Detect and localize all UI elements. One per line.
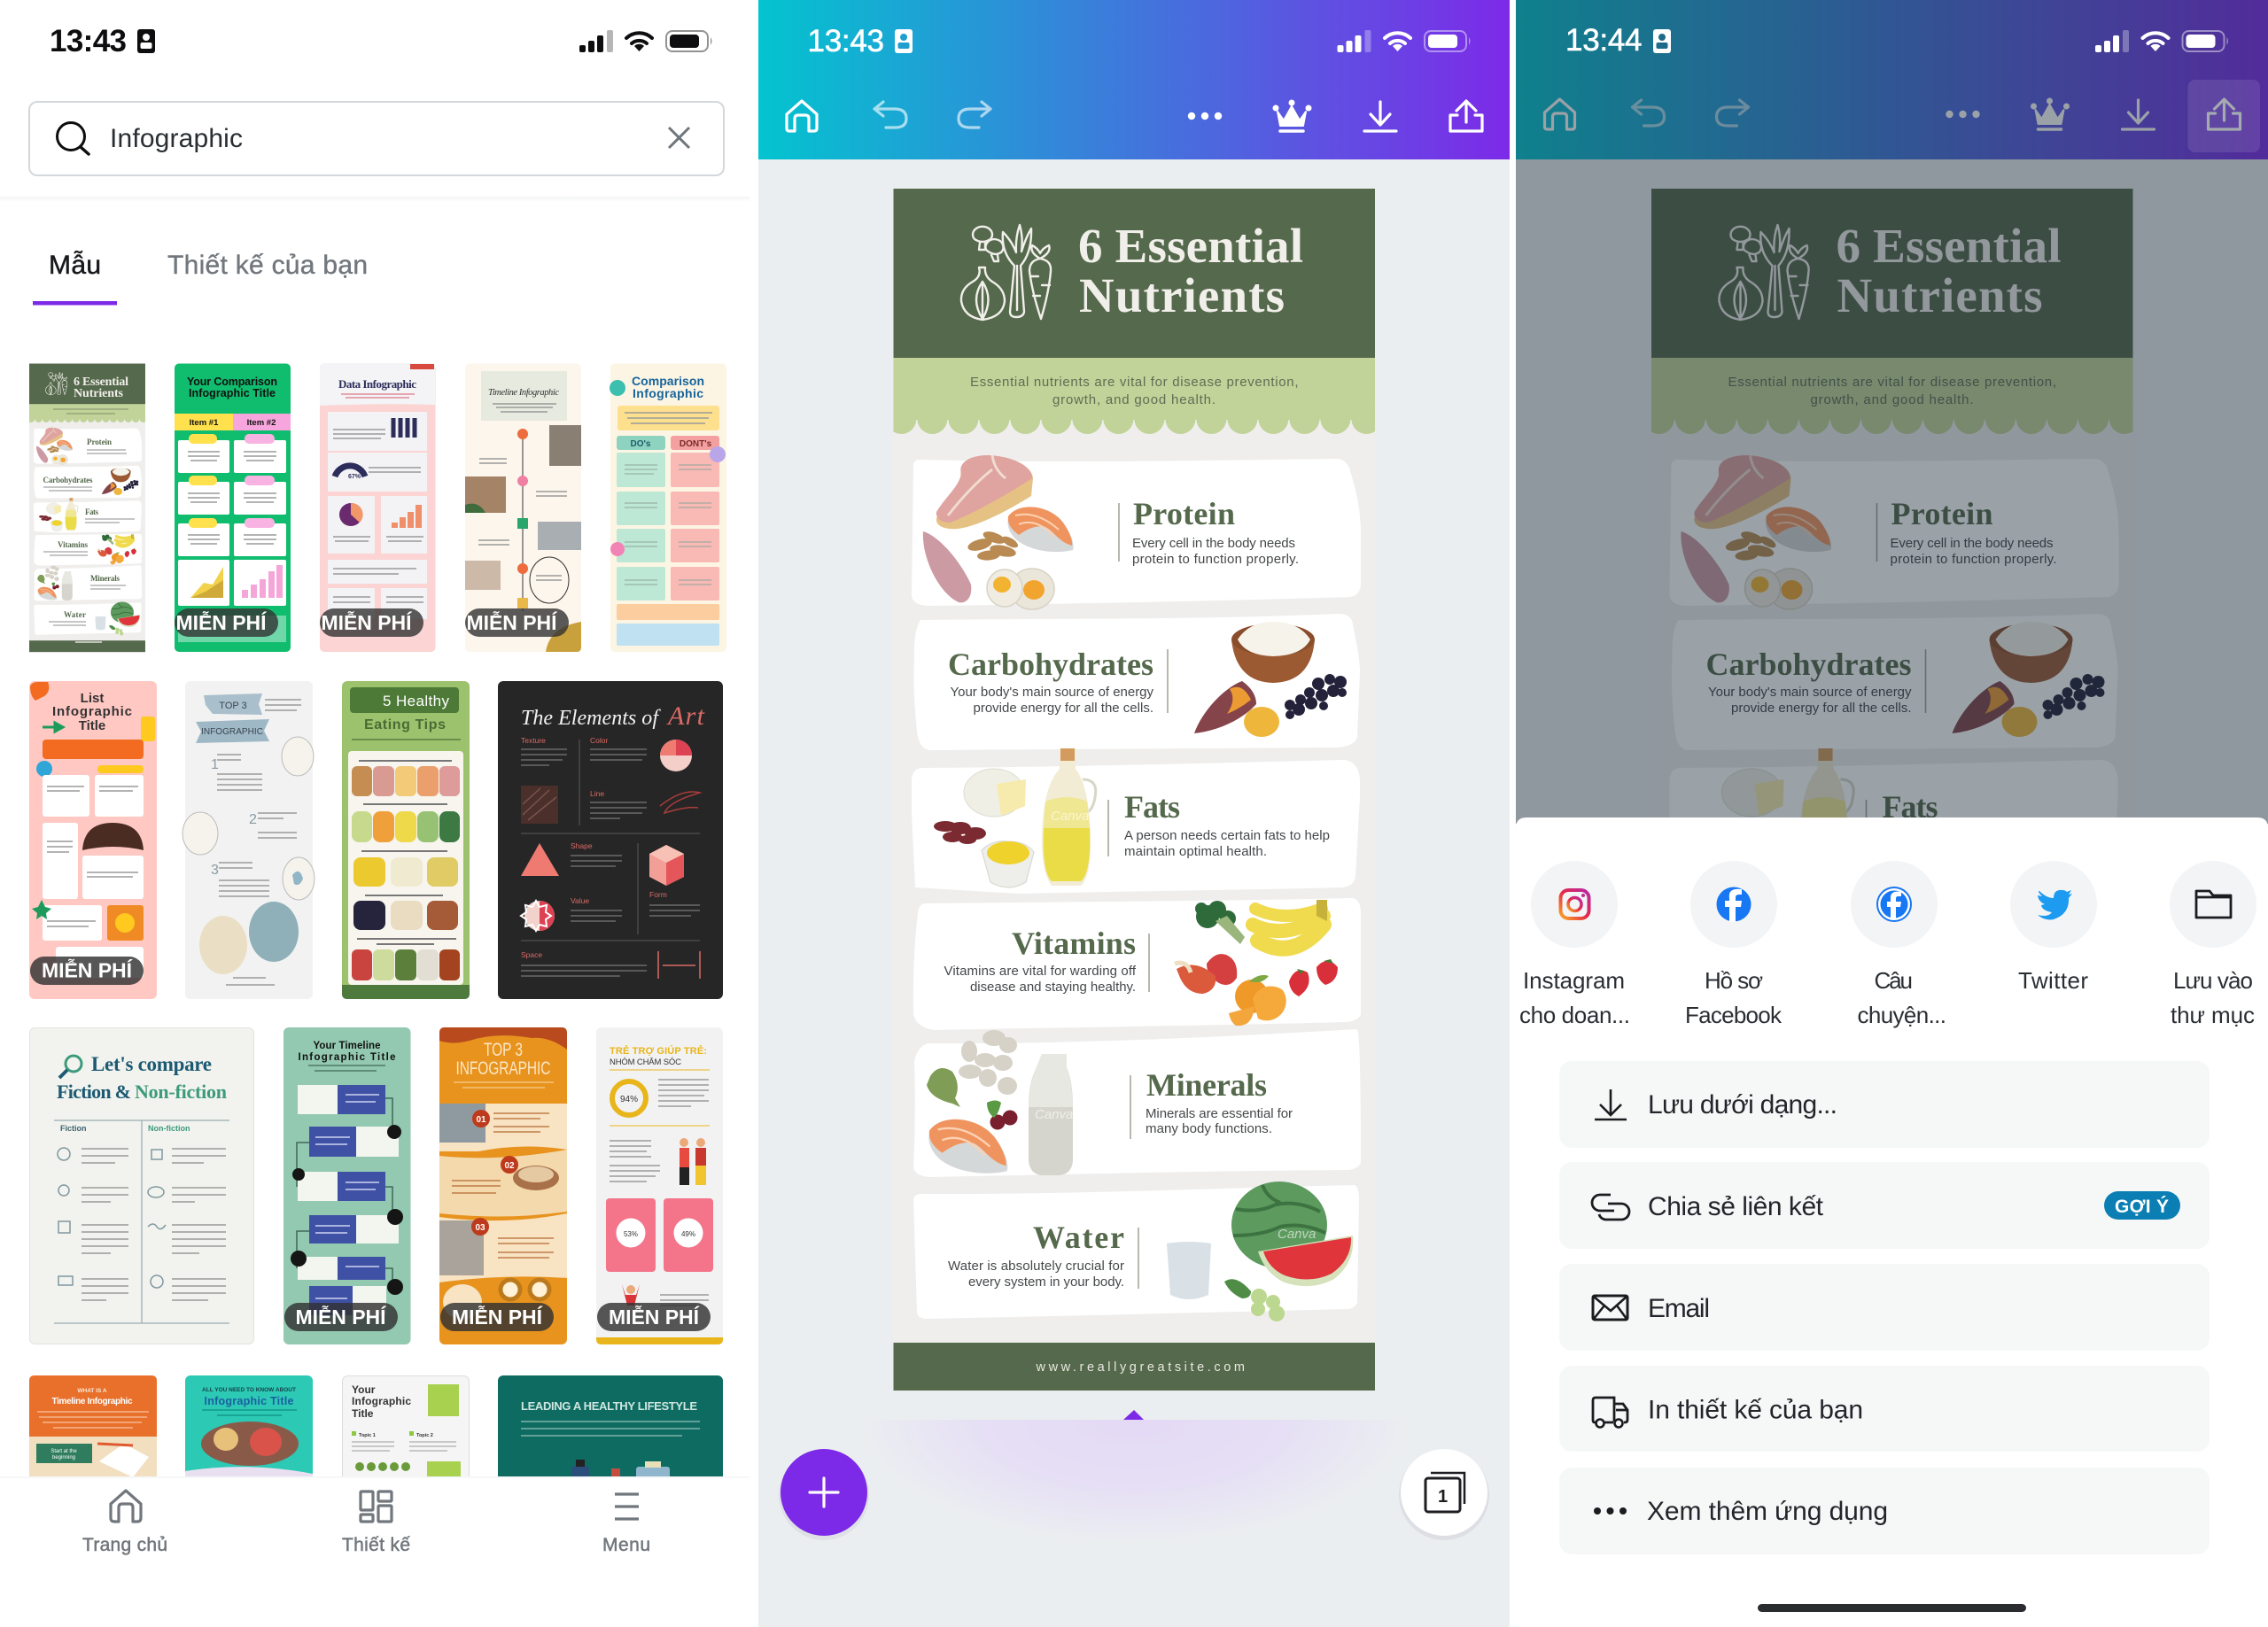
thumbnail: your infographic title partial: Topic 2 [416, 1433, 433, 1438]
panel: design editor screen [758, 0, 1510, 1627]
status bar: 13:43 [50, 24, 127, 58]
thumbnail: 6 Essential Nutrients: Nutrients [74, 387, 124, 400]
protein text [1119, 496, 1299, 567]
thumbnail: comparison do and dont: Infographic [633, 386, 703, 400]
row: more apps [1559, 1468, 2210, 1554]
canva watermarks: Canva [1051, 809, 1089, 824]
infographic canvas dimmed: Nutrients [1837, 268, 2043, 322]
thumbnail: comparison do and dont [610, 363, 726, 652]
thumbnail: timeline orange partial: Timeline Infographic [51, 1397, 133, 1406]
infographic canvas dimmed: Protein [1891, 496, 1993, 531]
thumbnail: your infographic title partial: Title [352, 1407, 374, 1420]
share target: facebook story [1851, 861, 1946, 1028]
free badges row 3: MIỄN PHÍ [452, 1304, 543, 1329]
thumbnail: 6 Essential Nutrients: Fats [85, 507, 98, 516]
thumbnail: top 3 orange infographic: 03 [475, 1223, 485, 1233]
free badge row 2: MIỄN PHÍ [42, 957, 133, 981]
footer url: www.reallygreatsite.com [1035, 1360, 1245, 1375]
fats text: Fats [1124, 789, 1180, 825]
row: share link: GỢI Ý [2115, 1196, 2169, 1217]
bottom navigation bar [0, 1476, 758, 1627]
share target: facebook story: chuyện... [1857, 1002, 1946, 1028]
thumbnail: the elements of art: Art [666, 701, 705, 731]
page handle arrow [1123, 1410, 1144, 1420]
thumbnail: comparison do and dont: DONT's [680, 439, 712, 449]
thumbnail: 6 Essential Nutrients: Minerals [90, 574, 120, 583]
thumbnail: top 3 sketch infographic: TOP 3 [219, 701, 247, 711]
thumbnail: data infographic: 67% [348, 474, 361, 480]
thumbnail: the elements of art: Form [649, 890, 667, 899]
water text: Water [1033, 1220, 1124, 1255]
thumbnail: 5 healthy eating tips [342, 681, 470, 999]
bottom navigation bar: Trang chủ [82, 1535, 167, 1555]
thumbnail: the elements of art: The Elements of [521, 707, 661, 730]
thumbnail: the elements of art [498, 681, 723, 999]
carbohydrates text: Your body's main source of energy [950, 685, 1153, 700]
thumbnail: data infographic [320, 363, 436, 652]
infographic canvas dimmed: provide energy for all the cells. [1731, 701, 1912, 716]
thumbnail: your infographic title partial [342, 1376, 470, 1486]
gradient top bar: 13:43 [808, 24, 884, 58]
infographic canvas dimmed: Fats [1882, 789, 1938, 825]
thumbnail: top 3 orange infographic: 01 [476, 1115, 486, 1125]
thumbnail: top 3 sketch infographic [183, 681, 315, 999]
row: email: Email [1648, 1294, 1710, 1323]
status bar [1565, 23, 2228, 58]
vitamins text: Vitamins are vital for warding off [944, 964, 1137, 979]
thumbnail: 6 Essential Nutrients: 6 Essential [74, 376, 128, 389]
thumbnail: 6 Essential Nutrients: Vitamins [58, 540, 88, 549]
infographic canvas [886, 189, 1381, 1391]
page count button: 1 [1438, 1487, 1448, 1507]
thumbnail: comparison do and dont: Comparison [632, 374, 704, 388]
thumbnail: 6 Essential Nutrients: Water [64, 610, 86, 619]
water text: every system in your body. [968, 1274, 1124, 1290]
thumbnail: comparison infographic: Your Comparison [187, 376, 277, 388]
thumbnail: lets compare fiction and non-fiction: Fiction [60, 1124, 87, 1133]
thumbnail: timeline orange partial: WHAT IS A [77, 1388, 107, 1394]
thumbnail: comparison infographic: Item #1 [190, 418, 219, 428]
thumbnail: tre tro giup tre: 49% [681, 1230, 695, 1238]
thumbnail: 6 Essential Nutrients: Carbohydrates [43, 476, 93, 484]
protein text: Every cell in the body needs [1132, 536, 1295, 551]
row: save as: Lưu dưới dạng... [1648, 1090, 1837, 1120]
share target: save to folder: Lưu vào [2173, 967, 2253, 994]
thumbnail: top 3 sketch infographic: 1 [211, 757, 219, 772]
row: print design: In thiết kế của bạn [1648, 1396, 1863, 1424]
thumbnail: your timeline infographic: Your Timeline [314, 1041, 381, 1051]
thumbnail: lets compare fiction and non-fiction: Non-fiction [135, 1081, 227, 1103]
intro text: growth, and good health. [1052, 392, 1216, 407]
share target: facebook profile: Facebook [1685, 1002, 1783, 1028]
thumbnail: list infographic [29, 681, 157, 999]
share target: instagram [1519, 861, 1630, 1028]
row: share link [1559, 1162, 2210, 1249]
thumbnail: 6 Essential Nutrients: Protein [87, 438, 112, 446]
status bar: 13:44 [1565, 23, 1643, 58]
thumbnail: comparison do and dont: DO's [631, 439, 651, 449]
row: email [1559, 1264, 2210, 1351]
infographic canvas dimmed [1644, 189, 2140, 1391]
dim overlay [1516, 0, 2268, 824]
thumbnail: infographic title teal partial: Infographic Title [204, 1395, 294, 1407]
intro text [970, 375, 1299, 407]
free badges row 3 [284, 1303, 711, 1331]
row: share link: Chia sẻ liên kết [1648, 1192, 1824, 1221]
carbohydrates text: Carbohydrates [948, 647, 1153, 682]
thumbnail: 5 healthy eating tips: Eating Tips [364, 717, 446, 732]
minerals text: many body functions. [1146, 1121, 1272, 1136]
share target: instagram: Instagram [1523, 967, 1625, 994]
thumbnail: top 3 orange infographic [439, 1027, 567, 1344]
bottom navigation bar: Menu [602, 1535, 650, 1555]
thumbnail: the elements of art: Shape [571, 841, 593, 850]
carbohydrates text: provide energy for all the cells. [973, 701, 1153, 716]
carbohydrates text [948, 647, 1168, 716]
water text [948, 1220, 1138, 1290]
free badges row 1: MIỄN PHÍ [321, 609, 412, 634]
add button [779, 1449, 869, 1540]
thumbnail: 5 healthy eating tips: 5 Healthy [383, 693, 450, 709]
page count button [1399, 1449, 1489, 1540]
share target: instagram: cho doan... [1519, 1002, 1630, 1028]
canva watermarks [1035, 809, 1316, 1242]
fats text: maintain optimal health. [1124, 844, 1267, 859]
thumbnail: lets compare fiction and non-fiction: Let's compare [91, 1053, 212, 1075]
thumbnail: timeline infographic: Timeline Infographic [488, 388, 559, 398]
share target: facebook profile [1685, 861, 1783, 1028]
thumbnail: the elements of art: Color [590, 736, 608, 745]
thumbnail: the elements of art: Line [590, 789, 604, 798]
protein text: Protein [1133, 496, 1235, 531]
thumbnail: top 3 sketch infographic: 3 [211, 863, 219, 878]
infographic canvas dimmed: 6 Essential [1836, 219, 2061, 273]
thumbnail: top 3 orange infographic: INFOGRAPHIC [455, 1057, 551, 1079]
row: save as [1559, 1061, 2210, 1148]
share target: save to folder [2170, 861, 2256, 1028]
thumbnail: infographic title teal partial [185, 1375, 313, 1488]
row: print design [1559, 1366, 2210, 1452]
purple glow under canvas [926, 1420, 1343, 1515]
free badges row 3: MIỄN PHÍ [296, 1304, 386, 1329]
free badge row 2 [30, 957, 144, 985]
infographic canvas dimmed: growth, and good health. [1811, 392, 1974, 407]
thumbnail: leading a healthy lifestyle partial: LEADING A HEALTHY LIFESTYLE [521, 1399, 697, 1413]
thumbnail: timeline orange partial [29, 1375, 157, 1486]
thumbnail: data infographic: Data Infographic [338, 377, 416, 391]
search box: Infographic [110, 124, 243, 153]
thumbnail: top 3 sketch infographic: 2 [249, 812, 257, 827]
bottom navigation bar: Thiết kế [342, 1535, 410, 1555]
vitamins text: Vitamins [1012, 926, 1136, 961]
title [1078, 219, 1303, 322]
thumbnail: infographic title teal partial: ALL YOU NEED TO KNOW ABOUT [202, 1387, 296, 1393]
thumbnail: comparison infographic: Item #2 [247, 418, 276, 428]
thumbnail: comparison infographic [175, 363, 291, 652]
fats text [1108, 789, 1330, 859]
share target: twitter [2010, 861, 2097, 994]
thumbnail: the elements of art: Space [521, 950, 542, 959]
vitamins text: disease and staying healthy. [970, 980, 1136, 995]
thumbnail: lets compare fiction and non-fiction: Fiction & [57, 1081, 131, 1103]
free badges row 3: MIỄN PHÍ [609, 1304, 700, 1329]
infographic canvas dimmed: protein to function properly. [1891, 552, 2057, 567]
thumbnail: tre tro giup tre [596, 1027, 723, 1344]
thumbnail: timeline orange partial: beginning [52, 1455, 75, 1460]
thumbnail: tre tro giup tre: NHÓM CHĂM SÓC [610, 1058, 681, 1067]
thumbnail: tre tro giup tre: TRẺ TRỢ GIÚP TRẺ: [610, 1045, 707, 1057]
vitamins text [944, 926, 1149, 995]
share target: facebook profile: Hồ sơ [1705, 967, 1763, 994]
thumbnail: list infographic: Infographic [52, 704, 132, 719]
infographic canvas dimmed: Every cell in the body needs [1891, 536, 2054, 551]
title: 6 Essential [1078, 219, 1303, 273]
water text: Water is absolutely crucial for [948, 1259, 1124, 1274]
canva watermarks: Canva [1035, 1107, 1073, 1122]
panel: template search screen [0, 0, 758, 1627]
thumbnail: timeline infographic [465, 363, 581, 652]
thumbnail: your infographic title partial: Infographic [352, 1395, 411, 1407]
free badges row 1: MIỄN PHÍ [175, 609, 267, 634]
thumbnail: timeline orange partial: Start at the [50, 1449, 77, 1454]
thumbnail: tre tro giup tre: 94% [620, 1095, 638, 1104]
thumbnail: top 3 sketch infographic: INFOGRAPHIC [201, 727, 263, 737]
thumbnail: tre tro giup tre: 53% [624, 1230, 638, 1238]
panel: share sheet screen [1516, 0, 2268, 1627]
gradient top bar dimmed [1516, 0, 2268, 159]
thumbnail: comparison infographic: Infographic Title [189, 387, 276, 399]
thumbnail: your infographic title partial: Topic 1 [359, 1433, 376, 1438]
thumbnail: lets compare fiction and non-fiction [30, 1027, 253, 1344]
fats text: A person needs certain fats to help [1124, 828, 1330, 843]
gradient top bar [758, 0, 1510, 159]
thumbnail: list infographic: List [81, 691, 104, 706]
tabs: Mẫu [49, 251, 101, 280]
share sheet [1516, 817, 2268, 1627]
free badges row 1: MIỄN PHÍ [466, 609, 557, 634]
infographic canvas dimmed: Essential nutrients are vital for disease prevention, [1728, 375, 2056, 390]
thumbnail: the elements of art: Texture [521, 736, 546, 745]
search box [29, 102, 724, 175]
thumbnail: your infographic title partial: Your [352, 1383, 376, 1396]
tabs [33, 251, 368, 305]
status bar [50, 24, 712, 58]
thumbnail: 6 Essential Nutrients [27, 363, 147, 652]
minerals text: Minerals are essential for [1146, 1106, 1293, 1121]
thumbnail: your timeline infographic: Infographic Title [298, 1052, 395, 1063]
infographic canvas dimmed: Carbohydrates [1706, 647, 1912, 682]
row: more apps: Xem thêm ứng dụng [1647, 1497, 1888, 1526]
share target: facebook story: Câu [1875, 967, 1913, 994]
tabs: Thiết kế của bạn [167, 251, 368, 280]
free badges row 1 [175, 608, 569, 637]
thumbnail: list infographic: Title [79, 718, 105, 733]
thumbnail: top 3 orange infographic: TOP 3 [484, 1038, 523, 1060]
thumbnail: the elements of art: Value [571, 896, 589, 905]
thumbnail: top 3 orange infographic: 02 [504, 1161, 515, 1171]
protein text: protein to function properly. [1132, 552, 1299, 567]
share target: save to folder: thư mục [2171, 1002, 2255, 1028]
minerals text [1130, 1067, 1293, 1139]
home indicator [1758, 1604, 2026, 1612]
thumbnail: lets compare fiction and non-fiction: Non-fiction [148, 1124, 190, 1133]
thumbnail: your timeline infographic [284, 1027, 411, 1344]
thumbnail: leading a healthy lifestyle partial [498, 1375, 723, 1486]
infographic canvas dimmed: Your body's main source of energy [1708, 685, 1912, 700]
title: Nutrients [1079, 268, 1285, 322]
share button highlight [2188, 80, 2260, 152]
minerals text: Minerals [1146, 1067, 1267, 1103]
canva watermarks: Canva [1278, 1227, 1316, 1242]
share target: twitter: Twitter [2018, 967, 2088, 994]
intro text: Essential nutrients are vital for disease prevention, [970, 375, 1299, 390]
